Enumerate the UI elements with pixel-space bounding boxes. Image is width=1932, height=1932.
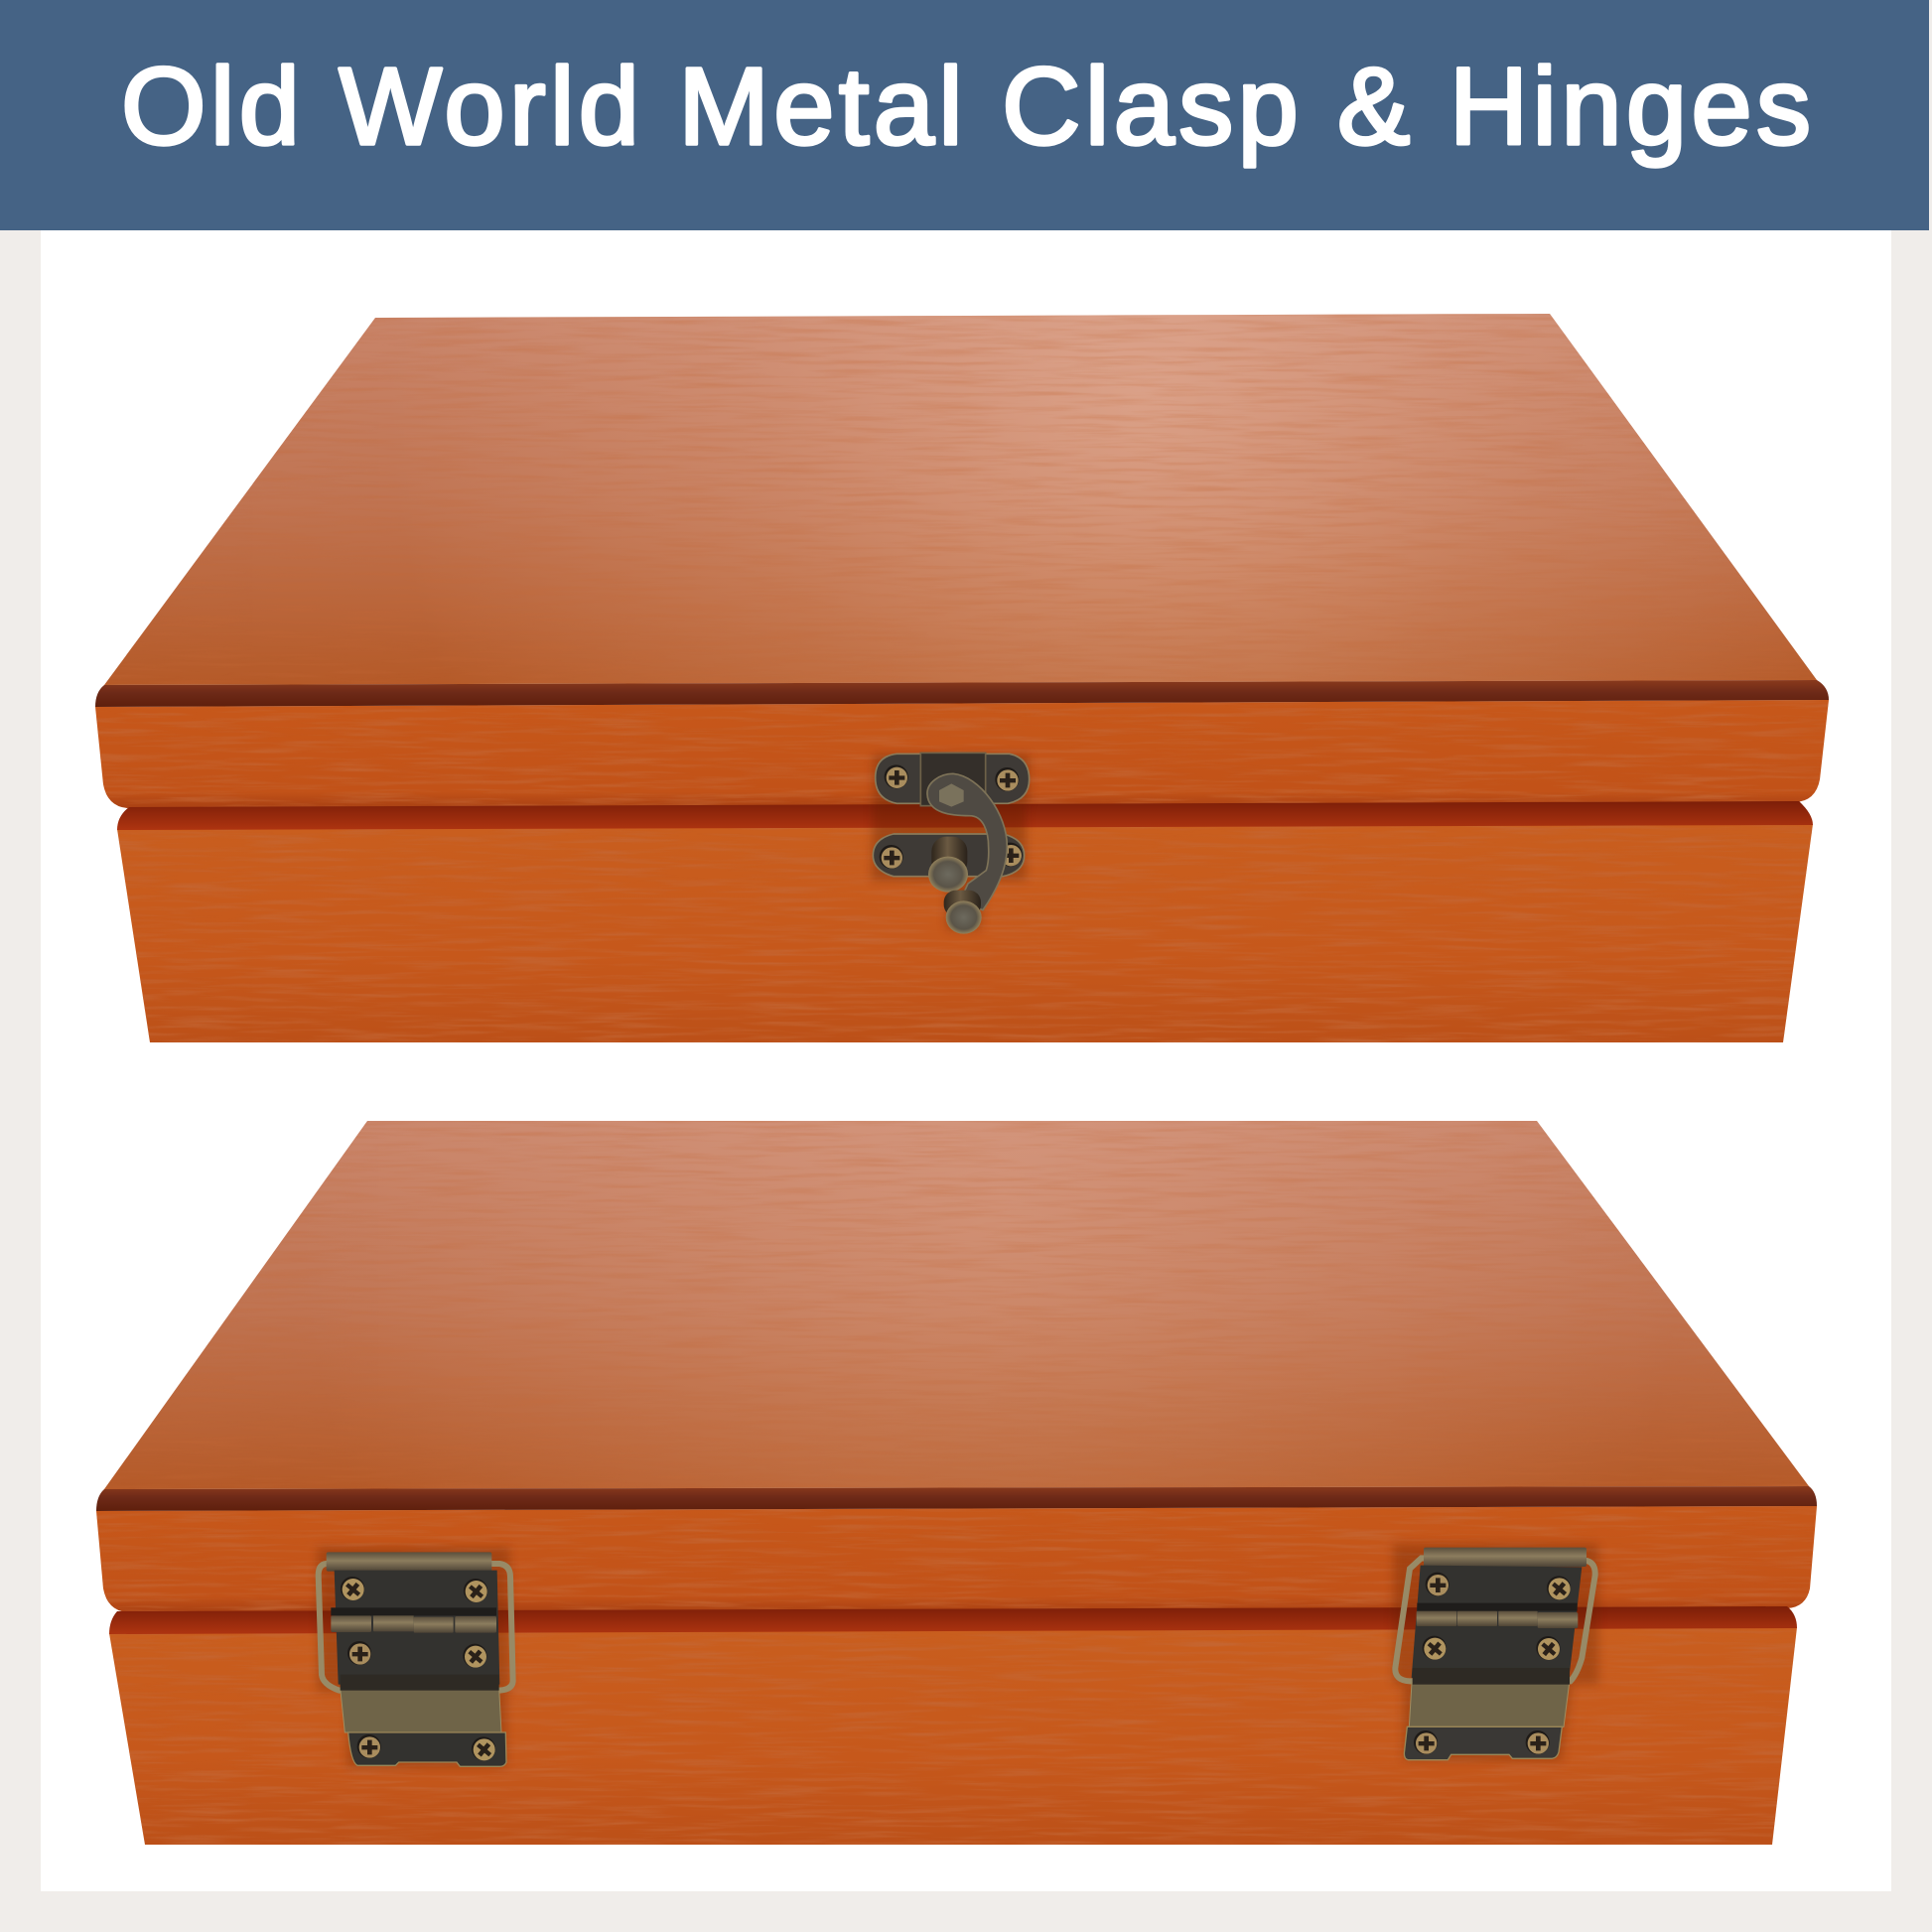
brass flap: [341, 1688, 501, 1732]
body: [104, 1606, 1802, 1847]
title: Old World Metal Clasp & Hinges: [121, 46, 1811, 168]
screws: [1426, 1573, 1449, 1596]
body: [109, 801, 1817, 1044]
lid front edge: [89, 680, 1837, 812]
top roll: [1424, 1548, 1587, 1567]
base plate: [1404, 1726, 1562, 1760]
upper knob: [928, 837, 968, 893]
lid top: [89, 1117, 1822, 1496]
screws: [341, 1577, 364, 1600]
brass flap: [1409, 1683, 1570, 1726]
photo: wooden box, back view with hinges: [89, 1117, 1822, 1847]
lid-body seam shadow: [134, 1598, 1777, 1618]
hinge knuckle: [1417, 1603, 1578, 1628]
lower clasp plate: [873, 834, 1025, 877]
icon: antique brass clasp: [872, 753, 1030, 934]
lower knob: [944, 891, 982, 934]
lid-body seam shadow: [134, 794, 1792, 819]
title banner: [0, 0, 1929, 230]
hinge leaves: [335, 1571, 499, 1685]
bail handle: [319, 1564, 513, 1691]
base plate: [348, 1732, 506, 1766]
top roll: [327, 1552, 491, 1572]
hinge knuckle: [331, 1607, 496, 1633]
lid back edge: [89, 1486, 1822, 1616]
upper clasp plate: [876, 753, 1030, 806]
bail handle: [1395, 1558, 1595, 1681]
lid top: [89, 308, 1837, 695]
curved latch arm: [927, 773, 1007, 910]
hinge leaves: [1412, 1566, 1582, 1681]
photo: wooden box, front view with clasp: [89, 308, 1837, 1044]
icon: right hinge: [1393, 1544, 1598, 1760]
icon: left hinge: [318, 1547, 513, 1767]
pivot rivet: [939, 783, 964, 807]
